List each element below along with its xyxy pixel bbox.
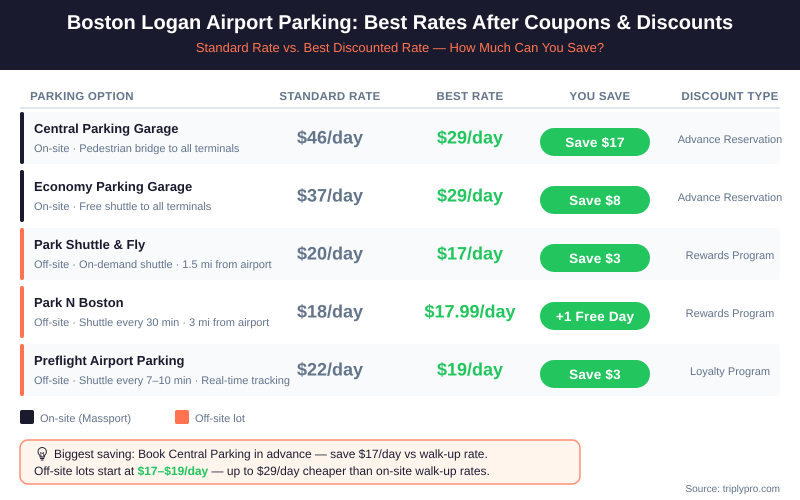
row: Economy Parking Garage: Economy Parking Garage (34, 179, 192, 194)
legend: Off-site lot (195, 413, 245, 425)
row: Park N Boston: $18/day (297, 302, 363, 322)
row: Preflight Airport Parking: $19/day (437, 360, 503, 380)
row: Preflight Airport Parking: Preflight Airport Parking (34, 353, 185, 368)
header banner (0, 0, 800, 70)
table column headers: BEST RATE (436, 91, 504, 103)
row: Economy Parking Garage: Save $8 (569, 193, 621, 208)
row: Preflight Airport Parking: Save $3 (569, 367, 621, 382)
row: Park N Boston: +1 Free Day (556, 309, 634, 324)
row: Economy Parking Garage: On-site · Free shuttle to all terminals (34, 201, 212, 213)
row: Central Parking Garage: Save $17 (565, 135, 625, 150)
row: Park N Boston: $17.99/day (424, 302, 516, 322)
row: Central Parking Garage (20, 112, 782, 164)
row: Economy Parking Garage: $37/day (297, 186, 363, 206)
row: Preflight Airport Parking: Off-site · Shuttle every 7–10 min · Real-time tracking (34, 375, 290, 387)
legend (20, 410, 245, 425)
row: Economy Parking Garage (20, 170, 782, 222)
row: Central Parking Garage: Central Parking Garage (34, 121, 178, 136)
table column headers: DISCOUNT TYPE (681, 91, 779, 103)
icon: light bulb (38, 448, 46, 460)
callout: biggest saving (20, 440, 580, 484)
table column headers: STANDARD RATE (279, 91, 381, 103)
source note: Source: triplypro.com (686, 484, 780, 495)
callout: biggest saving: Biggest saving: Book Central Parking in advance — save $17/day vs walk-up rate. (54, 447, 488, 461)
row: Economy Parking Garage: $29/day (437, 186, 503, 206)
row: Central Parking Garage: $29/day (437, 128, 503, 148)
row: Central Parking Garage: On-site · Pedestrian bridge to all terminals (34, 143, 240, 155)
title: Boston Logan Airport Parking: Best Rates After Coupons & Discounts (67, 12, 733, 34)
row: Park Shuttle & Fly: Off-site · On-demand shuttle · 1.5 mi from airport (34, 259, 272, 271)
row: Park Shuttle & Fly (20, 228, 780, 280)
row: Central Parking Garage: $46/day (297, 128, 363, 148)
row: Park Shuttle & Fly: Park Shuttle & Fly (34, 237, 146, 252)
row: Preflight Airport Parking: $22/day (297, 360, 363, 380)
row: Economy Parking Garage: Advance Reservation (678, 192, 782, 204)
row: Preflight Airport Parking: Loyalty Program (690, 366, 770, 378)
table column headers (20, 91, 780, 109)
row: Park Shuttle & Fly: $17/day (437, 244, 503, 264)
row: Preflight Airport Parking (20, 344, 780, 396)
row: Park N Boston (20, 286, 780, 338)
table column headers: PARKING OPTION (30, 91, 134, 103)
callout: biggest saving: Off-site lots start at $17–$19/day — up to $29/day cheaper than on-site walk-up rates. (34, 464, 490, 478)
row: Park Shuttle & Fly: $20/day (297, 244, 363, 264)
row: Central Parking Garage: Advance Reservation (678, 134, 782, 146)
row: Park N Boston: Park N Boston (34, 295, 124, 310)
legend: On-site (Massport) (40, 413, 131, 425)
table column headers: YOU SAVE (570, 91, 631, 103)
subtitle: Standard Rate vs. Best Discounted Rate — How Much Can You Save? (196, 40, 604, 55)
row: Park Shuttle & Fly: Rewards Program (686, 250, 774, 262)
row: Park N Boston: Rewards Program (686, 308, 774, 320)
row: Park Shuttle & Fly: Save $3 (569, 251, 621, 266)
row: Park N Boston: Off-site · Shuttle every 30 min · 3 mi from airport (34, 317, 269, 329)
